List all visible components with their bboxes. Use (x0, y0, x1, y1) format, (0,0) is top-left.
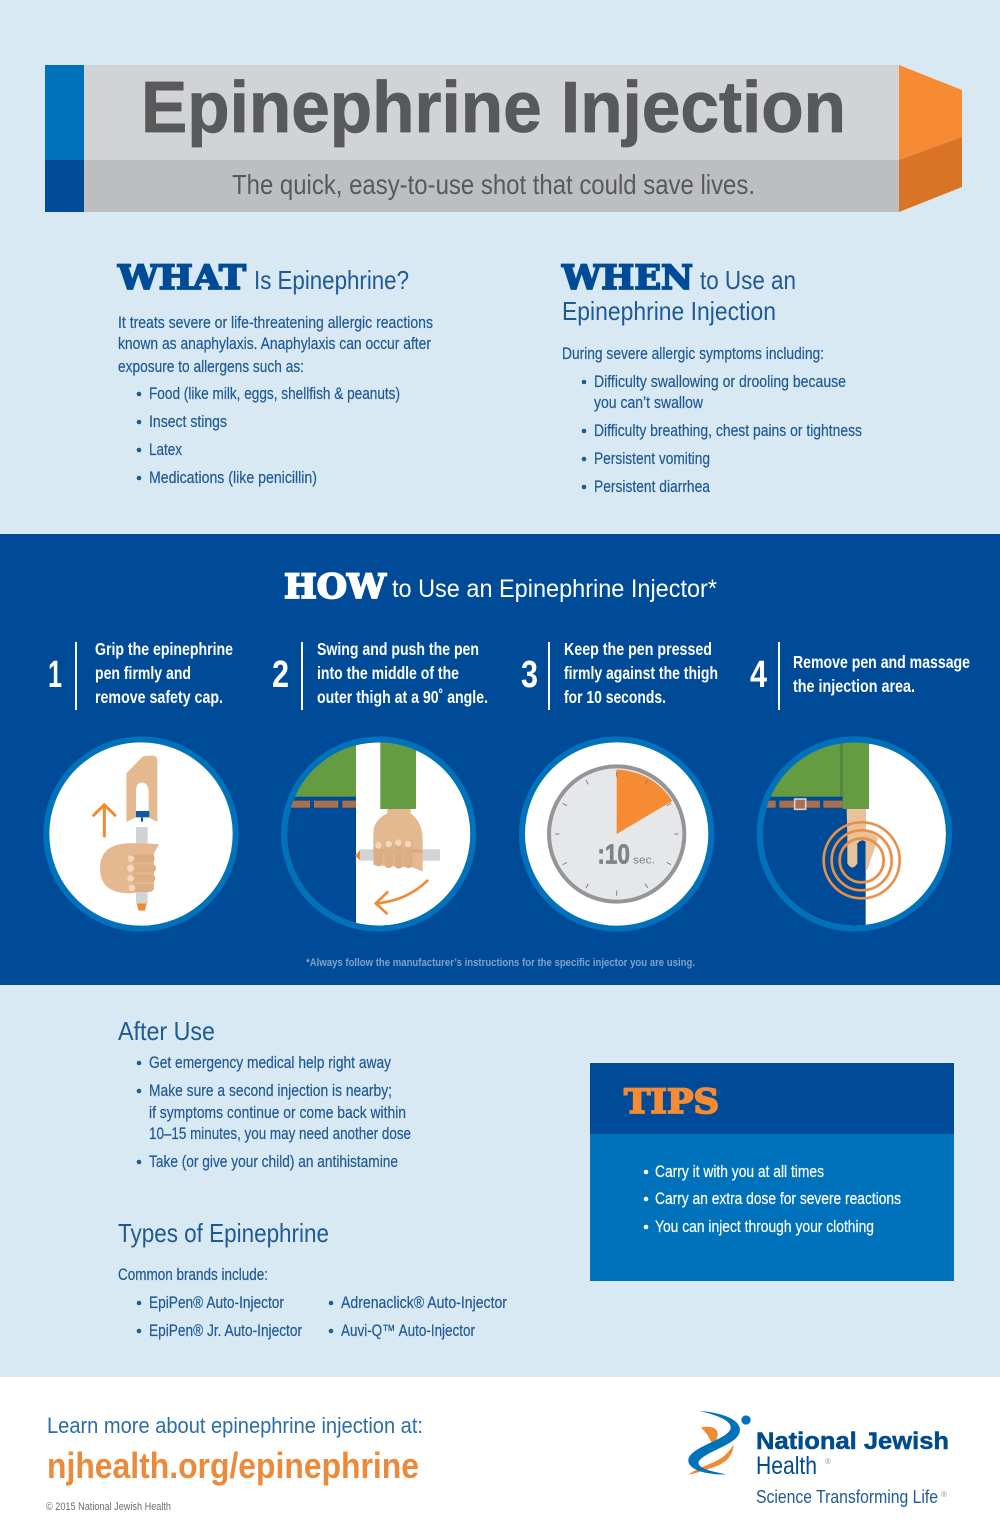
list: symptoms: Difficulty breathing, chest pains or tightness (594, 422, 862, 440)
text block: when intro: During severe allergic symptoms including: (562, 345, 824, 363)
heading: how (284, 567, 717, 607)
list: tips: You can inject through your clothing (655, 1218, 874, 1236)
heading: what: Is Epinephrine? (254, 265, 409, 295)
text: copyright: © 2015 National Jewish Health (46, 1501, 171, 1513)
list: allergens: Food (like milk, eggs, shellfish & peanuts) (149, 385, 400, 403)
list: allergens: Insect stings (149, 413, 227, 431)
panel: types of epinephrine (118, 1218, 507, 1340)
footnote: *Always follow the manufacturer’s instructions for the specific injector you are using. (306, 957, 695, 969)
step 4 text: 4 (750, 654, 767, 696)
list: symptoms: Persistent diarrhea (594, 478, 711, 496)
list: after use steps: Make sure a second injection is nearby; (149, 1082, 392, 1100)
list: allergens (137, 385, 400, 487)
text block: what description (118, 314, 433, 376)
list: allergens: Latex (149, 441, 183, 459)
list: tips (644, 1163, 901, 1236)
heading: when (561, 258, 796, 326)
step 2 text: into the middle of the (317, 663, 459, 683)
list: after use steps: Get emergency medical help right away (149, 1054, 392, 1072)
text block: brands intro: Common brands include: (118, 1266, 268, 1284)
list: brands (137, 1294, 507, 1340)
heading: how: to Use an Epinephrine Injector* (392, 575, 717, 603)
step 2 text: 2 (272, 654, 289, 696)
text: logo registered mark: ® (825, 1457, 831, 1466)
list: allergens: Medications (like penicillin) (149, 469, 317, 487)
step 1 text: Grip the epinephrine (95, 639, 233, 659)
list: after use steps (137, 1054, 411, 1171)
step 1 text: remove safety cap. (95, 687, 223, 707)
panel: after use (118, 1016, 411, 1171)
icon: step 3 ten second timer (522, 739, 711, 929)
step 4 text (750, 642, 970, 710)
step 1 text: pen firmly and (95, 663, 191, 683)
step 2 text (272, 639, 488, 710)
icon: step 2 push pen into thigh (283, 739, 473, 930)
list: after use steps: Take (or give your child) an antihistamine (149, 1153, 398, 1171)
step 3 text (521, 639, 718, 710)
timer label: sec. (633, 854, 655, 866)
text: url: njhealth.org/epinephrine (47, 1445, 419, 1486)
panel: tips (590, 1063, 954, 1281)
list: brands: EpiPen® Auto-Injector (149, 1294, 284, 1312)
list: after use steps: if symptoms continue or come back within (149, 1104, 406, 1122)
timer label: :10 (597, 838, 630, 869)
heading: what: WHAT (117, 258, 246, 298)
heading: how: HOW (284, 567, 387, 607)
heading: when: WHEN (561, 258, 693, 298)
icon: step 4 massage injection area (760, 739, 949, 930)
heading: what (117, 258, 409, 298)
heading: after use: After Use (118, 1016, 215, 1046)
step 4 text: the injection area. (793, 676, 915, 696)
text: logo tagline: Science Transforming Life (756, 1487, 938, 1507)
text: logo health: Health (756, 1452, 817, 1480)
step 3 text: firmly against the thigh (564, 663, 718, 683)
list: after use steps: 10–15 minutes, you may need another dose (149, 1125, 411, 1143)
logo: national jewish health (688, 1411, 949, 1507)
icon: step 1 remove safety cap (46, 739, 236, 929)
list: brands: EpiPen® Jr. Auto-Injector (149, 1322, 302, 1340)
step 1 text: 1 (48, 654, 62, 696)
step 1 text (48, 639, 233, 710)
list: tips: Carry an extra dose for severe reactions (655, 1190, 901, 1208)
step 2 text: outer thigh at a 90˚ angle. (317, 687, 488, 707)
title: Epinephrine Injection (141, 68, 846, 148)
text block: what description: exposure to allergens such as: (118, 358, 304, 376)
text block: what description: known as anaphylaxis. Anaphylaxis can occur after (118, 335, 431, 353)
list: symptoms: you can’t swallow (594, 394, 703, 412)
list: tips: Carry it with you at all times (655, 1163, 824, 1181)
list: brands: Auvi-Q™ Auto-Injector (341, 1322, 475, 1340)
panel: how to use (0, 534, 1000, 985)
panel: what is epinephrine (117, 258, 433, 487)
text: tagline registered mark: ® (941, 1490, 947, 1499)
panel: when to use (561, 258, 862, 496)
list: symptoms (582, 373, 862, 496)
heading: tips: TIPS (624, 1082, 719, 1122)
step 3 text: Keep the pen pressed (564, 639, 712, 659)
heading: when: to Use an (700, 265, 796, 295)
heading: types: Types of Epinephrine (118, 1218, 329, 1248)
text: learn more: Learn more about epinephrine injection at: (47, 1413, 423, 1438)
title banner: pencil-shaped syringe (45, 65, 962, 212)
step 3 text: for 10 seconds. (564, 687, 666, 707)
heading: when: Epinephrine Injection (562, 296, 776, 326)
text block: what description: It treats severe or life-threatening allergic reactions (118, 314, 433, 332)
list: symptoms: Persistent vomiting (594, 450, 710, 468)
panel: footer (0, 1377, 1000, 1540)
list: brands: Adrenaclick® Auto-Injector (341, 1294, 507, 1312)
step 3 text: 3 (521, 654, 538, 696)
list: symptoms: Difficulty swallowing or drooling because (594, 373, 846, 391)
text: logo name: National Jewish (756, 1428, 949, 1455)
subtitle: The quick, easy-to-use shot that could save lives. (232, 169, 755, 200)
step 2 text: Swing and push the pen (317, 639, 479, 659)
icon: helix mark (688, 1411, 751, 1474)
